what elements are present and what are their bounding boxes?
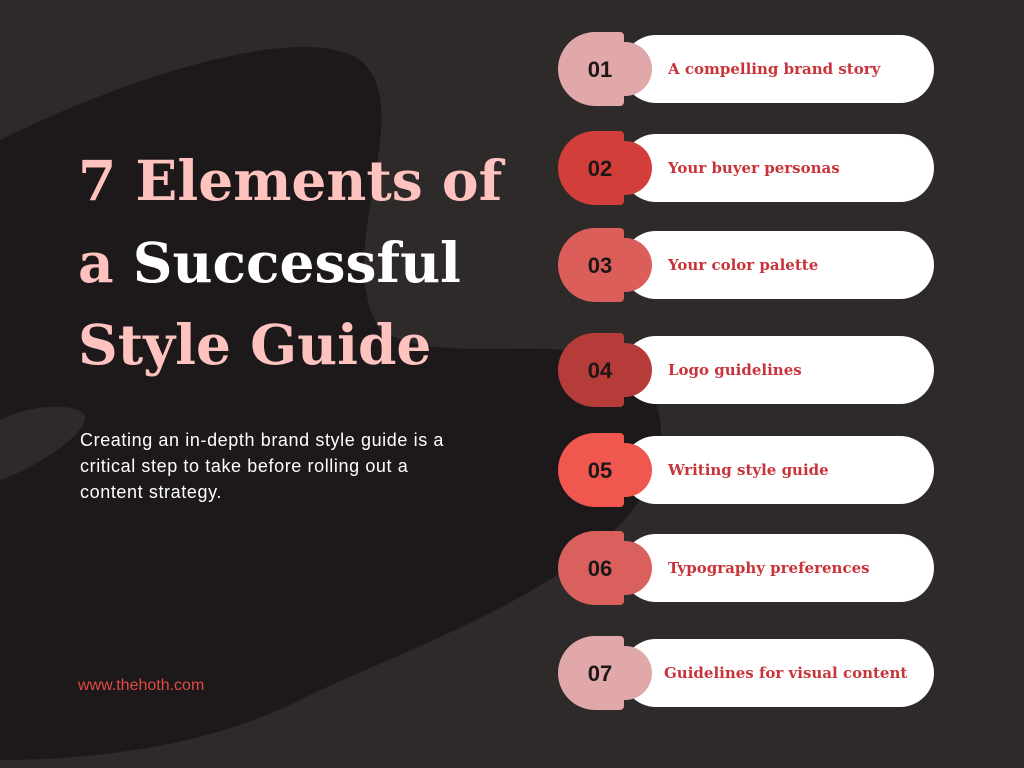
item 03: Your color palette xyxy=(668,256,818,274)
description: Creating an in-depth brand style guide is a critical step to take before rolling out a content strategy. xyxy=(80,430,444,502)
item 01: A compelling brand story xyxy=(668,60,880,78)
item 03: 03 xyxy=(588,253,612,278)
item 07: 07 xyxy=(588,661,612,686)
item 06: Typography preferences xyxy=(668,559,870,577)
item 07: Guidelines for visual content xyxy=(664,664,907,682)
item 02 xyxy=(558,131,934,205)
item 03 xyxy=(558,228,934,302)
title: a Successful xyxy=(78,230,461,295)
item 02: Your buyer personas xyxy=(668,159,840,177)
item 06: 06 xyxy=(588,556,612,581)
item 04: Logo guidelines xyxy=(668,361,802,379)
item 01 xyxy=(558,32,934,106)
title: 7 Elements of xyxy=(78,148,502,213)
item 04: 04 xyxy=(588,358,612,383)
title xyxy=(78,148,506,377)
item 05: Writing style guide xyxy=(668,461,829,479)
item 04 xyxy=(558,333,934,407)
item 05 xyxy=(558,433,934,507)
title: Style Guide xyxy=(78,312,431,377)
item 06 xyxy=(558,531,934,605)
item 07 xyxy=(558,636,934,710)
item 01: 01 xyxy=(588,57,612,82)
item 02: 02 xyxy=(588,156,612,181)
website url: www.thehoth.com xyxy=(78,677,204,694)
item 05: 05 xyxy=(588,458,612,483)
